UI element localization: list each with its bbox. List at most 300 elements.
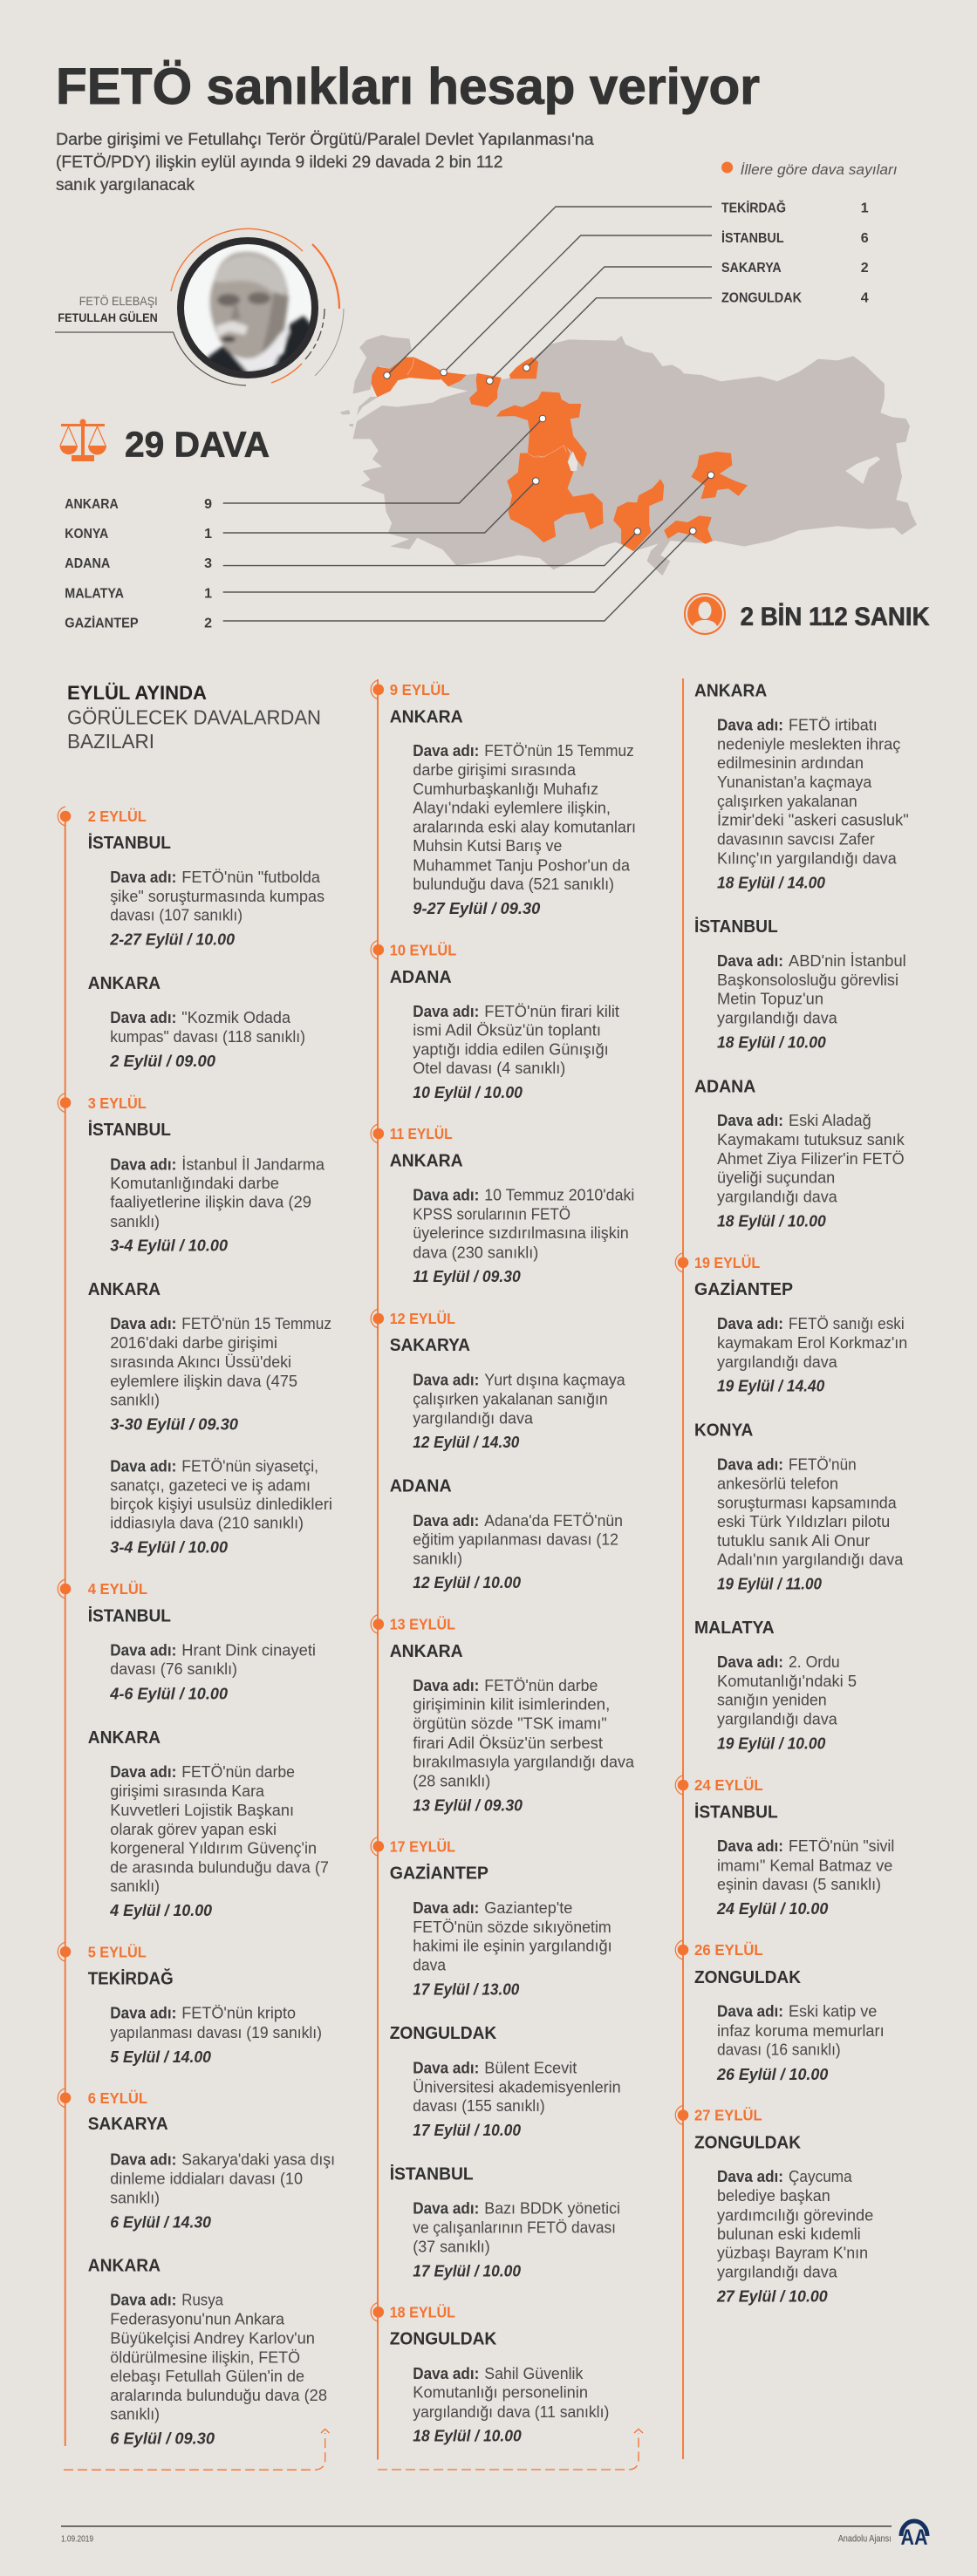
case: Ankara TSK imamı: 13 Eylül / 09.30 (413, 1796, 523, 1814)
date: 26 Eylül (675, 1940, 763, 1959)
case: Ankara askeri casusluk: ANKARA (694, 682, 767, 701)
case: Zonguldak Sahil Güvenlik: ZONGULDAK (390, 2330, 497, 2349)
case: Adana Aladağ: Ahmet Ziya Filizer'in FETÖ (717, 1150, 905, 1168)
south province list: ANKARA (65, 497, 119, 512)
case: Zonguldak katip: Eski katip ve (789, 2003, 877, 2021)
case: Ankara KPSS: 11 Eylül / 09.30 (413, 1268, 521, 1285)
case: Ankara Yıldırım Güvenç: girişimi sırasında Kara (110, 1782, 265, 1800)
case: Ankara Karlov: Dava adı: (110, 2292, 176, 2309)
arrow: column 1 to column 2 (64, 2429, 330, 2470)
north province list (721, 199, 869, 305)
case: Sakarya dinleme: dinleme iddiaları davası (10 (110, 2170, 303, 2187)
portrait caption (58, 293, 158, 324)
case: İstanbul Kemal Batmaz: eşinin davası (5 sanıklı) (717, 1876, 881, 1893)
case: Malatya 2. Ordu: MALATYA (694, 1619, 775, 1638)
case: Gaziantep Erol Korkmaz (694, 1279, 907, 1395)
footer credit: Anadolu Ajansı (838, 2534, 892, 2545)
north province list: 2 (861, 261, 869, 276)
date: 27 Eylül (675, 2105, 762, 2124)
date: 19 Eylül (675, 1253, 761, 1272)
case: Tekirdağ kripto: Dava adı: (110, 2005, 176, 2022)
case: İstanbul BDDK (390, 2164, 620, 2280)
lake Van (845, 456, 880, 484)
case: Sakarya dinleme: Sakarya'daki yasa dışı (181, 2150, 335, 2168)
section heading: GÖRÜLECEK DAVALARDAN (67, 705, 321, 728)
case: İstanbul Hrant Dink: İSTANBUL (88, 1606, 171, 1625)
case: Ankara Muhafız Alayı: ANKARA (390, 708, 463, 727)
date: 6 Eylül (58, 2089, 147, 2108)
province pins (384, 365, 714, 535)
case: Zonguldak Çaycuma: 27 Eylül / 10.00 (716, 2288, 828, 2306)
case: Ankara Akıncı Üssü: 2016'daki darbe girişimi (110, 1334, 277, 1352)
case: Tekirdağ kripto: TEKİRDAĞ (88, 1968, 174, 1989)
case: Zonguldak Bülent Ecevit: Dava adı: (413, 2059, 479, 2076)
case: Ankara Yıldırım Güvenç: ANKARA (88, 1728, 161, 1748)
case: Ankara kozmik oda: kumpas" davası (118 sanıklı) (110, 1028, 305, 1046)
case: Tekirdağ kripto: yapılanması davası (19 sanıklı) (110, 2024, 322, 2041)
case: Ankara Muhafız Alayı: FETÖ'nün 15 Temmuz (484, 742, 634, 760)
case: Konya ankesörlü: ankesörlü telefon (717, 1475, 838, 1493)
case: Ankara TSK imamı: FETÖ'nün darbe (484, 1677, 598, 1694)
north province list: 4 (861, 290, 869, 305)
case: Adana Aladağ: 18 Eylül / 10.00 (717, 1212, 826, 1230)
case: Sakarya yurt dışı: SAKARYA (390, 1336, 470, 1355)
date: 24 Eylül (675, 1775, 763, 1795)
case: Adana eğitim: Adana'da FETÖ'nün (484, 1512, 623, 1530)
date: 10 Eylül: 10 EYLÜL (390, 941, 457, 958)
subtitle text block (56, 131, 594, 194)
case: Zonguldak Çaycuma: Dava adı: (717, 2168, 783, 2185)
case: Adana eğitim (390, 1477, 623, 1591)
highlighted provinces (372, 358, 747, 551)
case: Gaziantep Erol Korkmaz: FETÖ sanığı eski (789, 1315, 905, 1332)
case: İstanbul Metin Topuz: Dava adı: (717, 952, 783, 970)
case: Ankara Muhafız Alayı: Cumhurbaşkanlığı Muhafız (413, 780, 598, 798)
case: Ankara Yıldırım Güvenç: korgeneral Yıldırım Güvenç'in (110, 1840, 317, 1857)
subtitle text block: sanık yargılanacak (56, 176, 195, 194)
case: Adana eğitim: ADANA (390, 1477, 452, 1496)
case: Adana Aladağ: yargılandığı dava (717, 1188, 838, 1205)
case: İstanbul jandarma: 3-4 Eylül / 10.00 (110, 1237, 228, 1255)
case: Zonguldak Sahil Güvenlik: yargılandığı dava (11 sanıklı) (413, 2403, 609, 2421)
panel: timeline column 1 (58, 807, 335, 2447)
case: Zonguldak Bülent Ecevit: davası (155 sanıklı) (413, 2097, 545, 2115)
case: Zonguldak katip: davası (16 sanıklı) (717, 2041, 841, 2058)
date: 26 Eylül: 26 EYLÜL (694, 1941, 763, 1959)
case: İstanbul Kemal Batmaz: 24 Eylül / 10.00 (716, 1900, 828, 1918)
case: Ankara kozmik oda: Dava adı: (110, 1009, 176, 1026)
case: Gaziantep sıkıyönetim: Dava adı: (413, 1899, 479, 1917)
case: Ankara Yıldırım Güvenç: Kuvvetleri Lojistik Başkanı (110, 1802, 294, 1819)
date: 11 Eylül: 11 EYLÜL (390, 1125, 453, 1142)
map of Turkey (340, 335, 917, 576)
case: İstanbul jandarma (88, 1120, 325, 1255)
stat: 29 dava: 29 DAVA (125, 424, 270, 464)
case: Gaziantep Erol Korkmaz: yargılandığı dava (717, 1353, 838, 1371)
case: İstanbul Metin Topuz (694, 917, 906, 1052)
case: Ankara Muhafız Alayı: bulunduğu dava (521 sanıklı) (413, 876, 614, 893)
south province list: ADANA (65, 556, 111, 571)
date: 18 Eylül: 18 EYLÜL (390, 2304, 455, 2321)
case: İstanbul BDDK: Dava adı: (413, 2199, 479, 2217)
case: İstanbul BDDK: ve çalışanlarının FETÖ davası (413, 2218, 616, 2236)
case: Ankara Karlov: sanıklı) (110, 2406, 160, 2423)
case: Gaziantep sıkıyönetim: dava (413, 1957, 447, 1974)
date: 17 Eylül: 17 EYLÜL (390, 1838, 455, 1856)
case: Sakarya dinleme: sanıklı) (110, 2189, 160, 2206)
case: Konya ankesörlü: soruşturması kapsamında (717, 1494, 898, 1511)
case: İstanbul Hrant Dink (88, 1606, 316, 1702)
case: Zonguldak Bülent Ecevit: ZONGULDAK (390, 2024, 497, 2043)
case: İstanbul BDDK: (37 sanıklı) (413, 2238, 490, 2255)
case: Sakarya dinleme: SAKARYA (88, 2115, 168, 2134)
case: Ankara TSK imamı: Dava adı: (413, 1677, 479, 1694)
case: Malatya 2. Ordu: Dava adı: (717, 1653, 783, 1671)
panel: timeline column 3 (675, 682, 909, 2306)
case: İstanbul futbolda şike: davası (107 sanıklı) (110, 907, 243, 924)
province: base silhouette (340, 335, 917, 576)
date: 12 Eylül: 12 EYLÜL (390, 1310, 455, 1327)
case: Ankara askeri casusluk: Yunanistan'a kaçmaya (717, 773, 872, 791)
case: Zonguldak Çaycuma: yüzbaşı Bayram K'nın (717, 2245, 868, 2262)
south province list: KONYA (65, 527, 109, 542)
case: Malatya 2. Ordu (694, 1619, 857, 1753)
case: Ankara Karlov (88, 2257, 327, 2447)
case: Ankara dinleme: Dava adı: (110, 1458, 176, 1475)
case: Adana Günışığı: ismi Adil Öksüz'ün toplantı (413, 1021, 601, 1039)
case: Ankara askeri casusluk: çalışırken yakalanan (717, 793, 857, 810)
case: Adana Günışığı: FETÖ'nün firari kilit (484, 1003, 619, 1020)
case: Sakarya dinleme: Dava adı: (110, 2150, 176, 2168)
case: İstanbul jandarma: İSTANBUL (88, 1120, 171, 1140)
panel: timeline column 2 (371, 680, 636, 2445)
case: Malatya 2. Ordu: 2. Ordu (789, 1653, 840, 1671)
case: Konya ankesörlü: 19 Eylül / 11.00 (717, 1575, 822, 1592)
case: Ankara TSK imamı: firari Adil Öksüz'ün serbest (413, 1734, 603, 1752)
case: Adana Aladağ: üyeliği suçundan (717, 1169, 835, 1186)
case: Ankara TSK imamı: girişiminin kilit isimlerinden, (413, 1696, 610, 1714)
case: Ankara Muhafız Alayı: Dava adı: (413, 742, 479, 760)
date: 12 Eylül (371, 1309, 455, 1328)
case: Ankara kozmik oda: "Kozmik Odada (181, 1009, 291, 1026)
case: Adana Aladağ: Eski Aladağ (789, 1112, 871, 1129)
case: Ankara askeri casusluk: nedeniyle meslekten ihraç (717, 736, 900, 753)
case: Konya ankesörlü: FETÖ'nün (789, 1456, 857, 1474)
case: İstanbul jandarma: sanıklı) (110, 1213, 160, 1230)
case: Adana Günışığı: ADANA (390, 968, 452, 987)
date: 3 Eylül (58, 1094, 147, 1113)
case: İstanbul futbolda şike: 2-27 Eylül / 10.00 (109, 931, 235, 949)
case: Konya ankesörlü: Adalı'nın yargılandığı dava (717, 1550, 904, 1568)
case: Ankara KPSS: Dava adı: (413, 1187, 479, 1204)
case: İstanbul Kemal Batmaz (694, 1802, 894, 1918)
case: Zonguldak Çaycuma (694, 2133, 873, 2306)
date: 3 Eylül: 3 EYLÜL (88, 1094, 147, 1112)
case: Ankara dinleme (110, 1458, 332, 1557)
case: Adana Aladağ: ADANA (694, 1077, 755, 1096)
footer date: 1.09.2019 (61, 2534, 93, 2545)
case: Adana Günışığı: Otel davası (4 sanıklı) (413, 1060, 565, 1077)
case: Ankara Karlov: elebaşı Fetullah Gülen'in de (110, 2368, 304, 2385)
case: İstanbul Metin Topuz: yargılandığı dava (717, 1010, 838, 1027)
connector lines (223, 207, 712, 621)
case: Ankara askeri casusluk (694, 682, 909, 891)
case: İstanbul Metin Topuz: İSTANBUL (694, 917, 778, 937)
case: İstanbul Kemal Batmaz: FETÖ'nün "sivil (789, 1837, 894, 1855)
case: Malatya 2. Ordu: yargılandığı dava (717, 1711, 838, 1728)
case: Adana Günışığı: Dava adı: (413, 1003, 479, 1020)
case: Ankara Karlov: 6 Eylül / 09.30 (110, 2429, 215, 2447)
case: Ankara Muhafız Alayı: darbe girişimi sırasında (413, 761, 577, 779)
case: Gaziantep sıkıyönetim: GAZİANTEP (390, 1864, 488, 1884)
case: İstanbul BDDK: Bazı BDDK yönetici (484, 2199, 620, 2217)
case: Ankara Karlov: aralarında bulunduğu dava (28 (110, 2387, 327, 2404)
case: Sakarya dinleme (88, 2115, 335, 2231)
case: Sakarya yurt dışı: 12 Eylül / 14.30 (413, 1434, 519, 1451)
case: Konya ankesörlü (694, 1421, 904, 1592)
case: Zonguldak Bülent Ecevit: Bülent Ecevit (484, 2059, 577, 2076)
case: Ankara kozmik oda: ANKARA (88, 974, 161, 993)
case: Ankara kozmik oda (88, 974, 305, 1070)
south province list: MALATYA (65, 587, 124, 602)
case: İstanbul futbolda şike: FETÖ'nün "futbolda (181, 869, 321, 886)
case: Sakarya yurt dışı: Dava adı: (413, 1371, 479, 1388)
case: Ankara Yıldırım Güvenç (88, 1728, 329, 1919)
portrait caption: FETÖ ELEBAŞI (79, 293, 158, 308)
south province list: 3 (204, 556, 212, 571)
case: Ankara Yıldırım Güvenç: Dava adı: (110, 1763, 176, 1781)
case: Ankara Akıncı Üssü: FETÖ'nün 15 Temmuz (181, 1315, 331, 1332)
case: Ankara Muhafız Alayı (390, 708, 636, 917)
date: 6 Eylül: 6 EYLÜL (88, 2089, 147, 2107)
case: Zonguldak Bülent Ecevit: 17 Eylül / 10.00 (413, 2122, 521, 2139)
date: 11 Eylül (371, 1124, 453, 1143)
case: Ankara dinleme: iddiasıyla dava (210 sanıklı) (110, 1514, 304, 1531)
case: İstanbul jandarma: faaliyetlerine ilişkin dava (29 (110, 1194, 311, 1211)
case: Konya ankesörlü: Dava adı: (717, 1456, 783, 1474)
date: 13 Eylül (371, 1615, 455, 1634)
north province list: TEKİRDAĞ (721, 199, 786, 216)
case: Tekirdağ kripto: FETÖ'nün kripto (181, 2005, 296, 2022)
case: İstanbul Metin Topuz: ABD'nin İstanbul (789, 952, 906, 970)
case: İstanbul Kemal Batmaz: imamı" Kemal Batmaz ve (717, 1857, 892, 1874)
case: Zonguldak Sahil Güvenlik: Sahil Güvenlik (484, 2365, 584, 2382)
case: Ankara Karlov: Büyükelçisi Andrey Karlov'un (110, 2329, 315, 2347)
case: Ankara dinleme: 3-4 Eylül / 10.00 (110, 1539, 228, 1557)
case: Ankara Akıncı Üssü (88, 1280, 331, 1434)
case: Zonguldak Çaycuma: belediye başkan (717, 2187, 830, 2205)
logo: Anadolu Ajansı: AA (900, 2525, 928, 2550)
case: Ankara Karlov: Rusya (181, 2292, 224, 2309)
case: Konya ankesörlü: tutuklu sanık Ali Onur (717, 1532, 870, 1550)
case: Zonguldak Bülent Ecevit (390, 2024, 621, 2139)
case: İstanbul futbolda şike: Dava adı: (110, 869, 176, 886)
arrow: column 2 to column 3 (378, 2429, 643, 2470)
case: Ankara dinleme: sanatçı, gazeteci ve iş adamı (110, 1476, 311, 1494)
case: Ankara askeri casusluk: İzmir'deki "askeri casusluk" (717, 811, 909, 828)
case: Sakarya yurt dışı (390, 1336, 626, 1451)
case: Tekirdağ kripto (88, 1968, 322, 2066)
case: Sakarya yurt dışı: çalışırken yakalanan sanığın (413, 1390, 608, 1407)
date: 5 Eylül: 5 EYLÜL (88, 1943, 147, 1960)
case: Zonguldak Çaycuma: yardımcılığı görevinde (717, 2206, 873, 2224)
footer rule (61, 2525, 892, 2527)
case: Gaziantep Erol Korkmaz: kaymakam Erol Korkmaz'ın (717, 1334, 907, 1352)
case: Ankara askeri casusluk: davasının savcısı Zafer (717, 830, 875, 848)
north province list: İSTANBUL (721, 230, 784, 246)
case: Ankara askeri casusluk: edilmesinin ardından (717, 754, 864, 772)
subtitle text block: Darbe girişimi ve Fetullahçı Terör Örgütü/Paralel Devlet Yapılanması'na (56, 131, 594, 149)
case: Zonguldak Sahil Güvenlik: 18 Eylül / 10.00 (413, 2428, 522, 2445)
case: Ankara TSK imamı (390, 1642, 635, 1814)
south province list: 1 (204, 527, 212, 542)
case: Adana eğitim: eğitim yapılanması davası (12 (413, 1531, 618, 1549)
case: Ankara Akıncı Üssü: sanıklı) (110, 1391, 160, 1408)
case: Ankara Yıldırım Güvenç: FETÖ'nün darbe (181, 1763, 295, 1781)
case: Gaziantep sıkıyönetim: hakimi ile eşinin yargılandığı (413, 1938, 612, 1955)
case: Zonguldak katip: ZONGULDAK (694, 1968, 802, 1987)
case: Ankara Muhafız Alayı: Muhsin Kutsi Barış ve (413, 837, 562, 855)
icon: scales (60, 419, 106, 461)
section heading (67, 682, 321, 753)
case: Gaziantep sıkıyönetim: 17 Eylül / 13.00 (413, 1981, 519, 1999)
case: Ankara Karlov: ANKARA (88, 2257, 161, 2276)
date: 4 Eylül (58, 1579, 147, 1598)
south province list (65, 497, 212, 631)
north province list: SAKARYA (721, 261, 782, 276)
date: 17 Eylül (371, 1837, 455, 1856)
case: Malatya 2. Ordu: Komutanlığı'ndaki 5 (717, 1673, 857, 1690)
case: İstanbul Hrant Dink: 4-6 Eylül / 10.00 (109, 1685, 228, 1702)
case: Adana Günışığı: yaptığı iddia edilen Günışığı (413, 1040, 609, 1058)
case: Gaziantep Erol Korkmaz: GAZİANTEP (694, 1279, 793, 1299)
case: Ankara Yıldırım Güvenç: de arasında bulunduğu dava (7 (110, 1859, 329, 1877)
case: Zonguldak katip: 26 Eylül / 10.00 (716, 2066, 828, 2083)
case: Zonguldak Sahil Güvenlik (390, 2330, 609, 2445)
case: Gaziantep sıkıyönetim (390, 1864, 612, 1999)
date: 10 Eylül (371, 940, 457, 959)
case: Gaziantep Erol Korkmaz: Dava adı: (717, 1315, 783, 1332)
case: Sakarya dinleme: 6 Eylül / 14.30 (110, 2213, 211, 2231)
title: FETÖ sanıkları hesap veriyor (56, 58, 760, 115)
timeline line: column 1 (65, 816, 66, 2446)
south province list: 1 (204, 587, 212, 602)
case: Zonguldak Sahil Güvenlik: Komutanlığı personelinin (413, 2384, 588, 2402)
case: Gaziantep sıkıyönetim: FETÖ'nün sözde sıkıyönetim (413, 1918, 611, 1936)
south province list: 9 (204, 497, 212, 512)
case: Ankara askeri casusluk: 18 Eylül / 14.00 (717, 874, 825, 891)
case: Ankara Muhafız Alayı: Alayı'ndaki eylemlere ilişkin, (413, 800, 611, 817)
case: Ankara Akıncı Üssü: eylemlere ilişkin dava (475 (110, 1373, 297, 1390)
case: İstanbul futbolda şike (88, 833, 325, 949)
icon: person (685, 594, 725, 634)
portrait caption: FETULLAH GÜLEN (58, 310, 158, 324)
stat: 2 bin 112 sanık: 2 BİN 112 SANIK (741, 603, 930, 631)
date: 9 Eylül (371, 680, 450, 699)
case: İstanbul Metin Topuz: Metin Topuz'un (717, 991, 823, 1008)
case: Ankara askeri casusluk: FETÖ irtibatı (789, 717, 878, 734)
case: Adana Aladağ: Kaymakamı tutuksuz sanık (717, 1131, 905, 1148)
case: Ankara KPSS: dava (230 sanıklı) (413, 1244, 538, 1261)
north province list: ZONGULDAK (721, 290, 802, 305)
case: Adana Günışığı (390, 968, 619, 1101)
case: Zonguldak Bülent Ecevit: Üniversitesi akademisyenlerin (413, 2078, 621, 2096)
case: Sakarya yurt dışı: Yurt dışına kaçmaya (484, 1371, 626, 1388)
south province list: GAZİANTEP (65, 616, 139, 631)
case: Adana Aladağ: Dava adı: (717, 1112, 783, 1129)
date: 5 Eylül (58, 1942, 147, 1961)
case: Zonguldak Çaycuma: Çaycuma (789, 2168, 853, 2185)
case: İstanbul BDDK: İSTANBUL (390, 2164, 474, 2184)
section heading: EYLÜL AYINDA (67, 682, 207, 704)
case: Zonguldak katip (694, 1968, 885, 2083)
case: İstanbul jandarma: Dava adı: (110, 1155, 176, 1173)
case: Ankara KPSS: 10 Temmuz 2010'daki (484, 1187, 634, 1204)
case: Zonguldak Çaycuma: ZONGULDAK (694, 2133, 802, 2152)
case: Ankara dinleme: FETÖ'nün siyasetçi, (181, 1458, 318, 1475)
case: Ankara Yıldırım Güvenç: olarak görev yapan eski (110, 1821, 277, 1838)
case: Ankara Akıncı Üssü: Dava adı: (110, 1315, 176, 1332)
case: İstanbul futbolda şike: şike" soruşturmasında kumpas (110, 888, 325, 905)
case: Konya ankesörlü: eski Türk Yıldızları pilotu (717, 1513, 890, 1530)
timeline line: column 2 (377, 679, 379, 2459)
subtitle text block: (FETÖ/PDY) ilişkin eylül ayında 9 ildeki 29 davada 2 bin 112 (56, 153, 502, 172)
case: Ankara KPSS: ANKARA (390, 1152, 463, 1171)
date: 13 Eylül: 13 EYLÜL (390, 1616, 455, 1633)
case: Ankara Yıldırım Güvenç: sanıklı) (110, 1877, 160, 1895)
case: Tekirdağ kripto: 5 Eylül / 14.00 (110, 2048, 211, 2066)
date: 9 Eylül: 9 EYLÜL (390, 681, 450, 699)
case: İstanbul Hrant Dink: Hrant Dink cinayeti (181, 1641, 316, 1659)
date: 24 Eylül: 24 EYLÜL (694, 1776, 763, 1794)
case: İstanbul Kemal Batmaz: İSTANBUL (694, 1802, 778, 1822)
case: Gaziantep sıkıyönetim: Gaziantep'te (484, 1899, 572, 1917)
south province list: 2 (204, 616, 212, 631)
case: İstanbul Hrant Dink: Dava adı: (110, 1641, 176, 1659)
case: Ankara Akıncı Üssü: sırasında Akıncı Üssü'deki (110, 1353, 291, 1371)
case: Malatya 2. Ordu: sanığın yeniden (717, 1692, 827, 1709)
north province list: 1 (861, 201, 869, 216)
case: Zonguldak Sahil Güvenlik: Dava adı: (413, 2365, 479, 2382)
case: Malatya 2. Ordu: 19 Eylül / 10.00 (717, 1735, 825, 1753)
case: İstanbul Hrant Dink: davası (76 sanıklı) (110, 1660, 237, 1678)
case: Adana Günışığı: 10 Eylül / 10.00 (413, 1084, 523, 1101)
case: Ankara KPSS: KPSS sorularının FETÖ (413, 1206, 570, 1223)
case: İstanbul Metin Topuz: 18 Eylül / 10.00 (717, 1034, 826, 1052)
case: Ankara Muhafız Alayı: Muhammet Tanju Poshor'un da (413, 856, 631, 874)
date: 2 Eylül: 2 EYLÜL (88, 808, 147, 825)
case: Ankara Akıncı Üssü: 3-30 Eylül / 09.30 (110, 1416, 238, 1434)
section heading: BAZILARI (67, 730, 154, 753)
case: Ankara askeri casusluk: Kılınç'ın yargılandığı dava (717, 849, 898, 867)
case: Zonguldak katip: Dava adı: (717, 2003, 783, 2021)
case: İstanbul Kemal Batmaz: Dava adı: (717, 1837, 783, 1855)
case: Ankara Karlov: Federasyonu'nun Ankara (110, 2311, 285, 2328)
case: Sakarya yurt dışı: yargılandığı dava (413, 1409, 534, 1427)
north province list: 6 (861, 231, 869, 246)
portrait: Fetullah Gülen (55, 228, 344, 388)
case: Ankara Akıncı Üssü: ANKARA (88, 1280, 161, 1299)
date: 18 Eylül (371, 2302, 455, 2321)
case: Ankara Yıldırım Güvenç: 4 Eylül / 10.00 (109, 1902, 212, 1919)
case: Ankara KPSS (390, 1152, 634, 1285)
lake Tuz (568, 451, 577, 471)
date: 2 Eylül (58, 807, 147, 826)
case: Adana eğitim: Dava adı: (413, 1512, 479, 1530)
case: Ankara askeri casusluk: Dava adı: (717, 717, 783, 734)
case: İstanbul BDDK: 17 Eylül / 10.00 (413, 2262, 521, 2280)
case: Ankara dinleme: birçok kişiyi usulsüz dinledikleri (110, 1496, 332, 1513)
